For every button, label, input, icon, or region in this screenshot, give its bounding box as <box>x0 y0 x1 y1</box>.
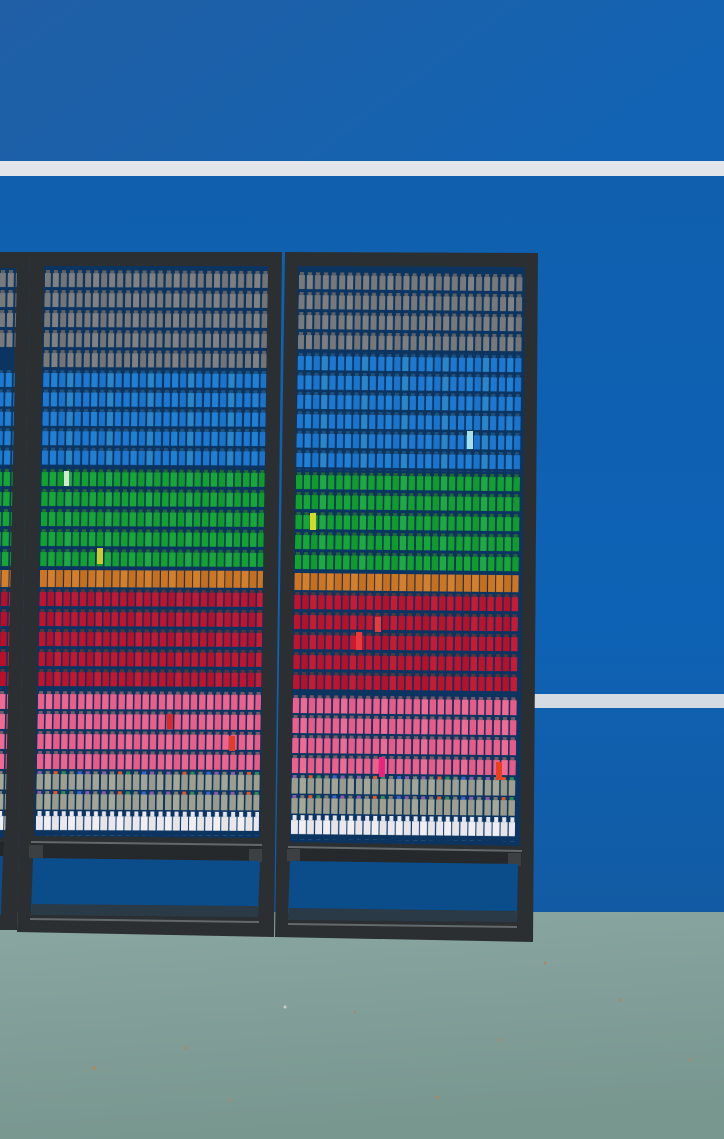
panel: right frame <box>275 252 538 942</box>
white wall stripe <box>0 161 724 176</box>
bottom rail highlight <box>288 923 517 928</box>
lower window <box>31 858 260 915</box>
lower white wall stripe <box>530 694 724 708</box>
hinge right <box>249 849 262 862</box>
window reflection <box>288 908 518 922</box>
panel: middle frame <box>17 252 282 937</box>
hinge left <box>287 849 300 861</box>
lower window <box>288 861 518 917</box>
crossbar <box>287 847 522 864</box>
lighter grid: left panel <box>0 270 17 835</box>
hinge right <box>508 853 521 866</box>
crossbar <box>30 842 262 861</box>
crossbar highlight <box>31 841 262 846</box>
bottom rail highlight <box>30 918 259 923</box>
lighter grid: middle panel <box>36 270 268 836</box>
odd coloured lighters <box>310 431 502 780</box>
panel: left partial frame <box>0 252 30 930</box>
lower window sliver <box>0 856 3 915</box>
lighter grid: right panel <box>291 272 523 841</box>
odd coloured lighters <box>64 471 235 751</box>
window reflection <box>31 904 259 917</box>
grey-green floor <box>0 912 724 1139</box>
floor debris <box>92 962 691 1101</box>
crossbar highlight <box>288 846 522 852</box>
blue wall upper <box>0 0 724 162</box>
blue wall lower <box>0 176 724 914</box>
crossbar sliver <box>0 842 4 856</box>
hinge left <box>29 845 43 858</box>
